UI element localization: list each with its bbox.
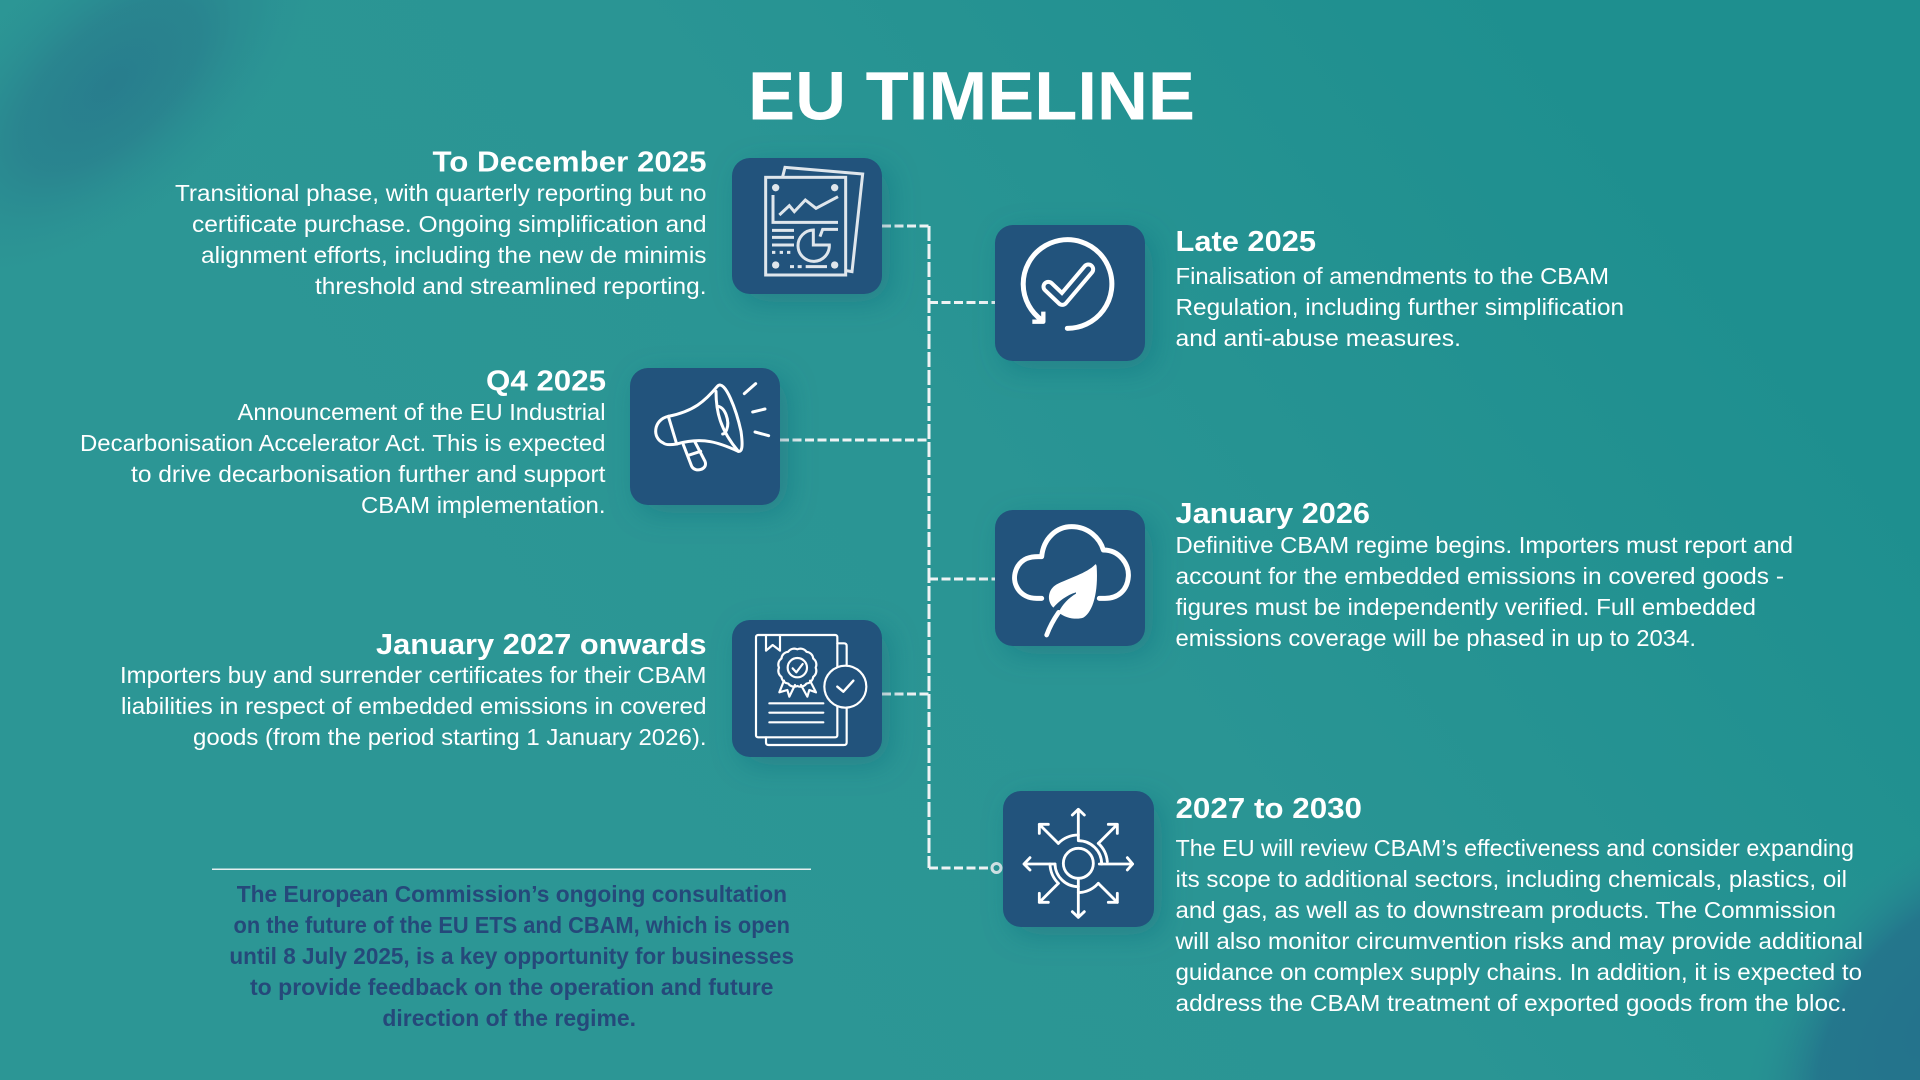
callout: consultation note: to provide feedback on the operation and future — [250, 974, 774, 1000]
heading: 2027 to 2030: 2027 to 2030 — [1176, 793, 1362, 825]
body: To December 2025: threshold and streamlined reporting. — [315, 273, 706, 299]
callout: consultation note — [212, 868, 811, 1031]
body: January 2027 onwards: Importers buy and surrender certificates for their CBAM — [120, 662, 706, 688]
heading: Q4 2025: Q4 2025 — [486, 366, 606, 398]
panel: Late 2025 text — [1176, 226, 1624, 351]
panel: Q4 2025 text — [80, 366, 606, 518]
body: Late 2025 — [1176, 263, 1624, 351]
body: Q4 2025: to drive decarbonisation further and support — [131, 461, 606, 487]
icon: report documents — [732, 158, 882, 294]
callout: consultation note: on the future of the EU ETS and CBAM, which is open — [234, 912, 790, 938]
body: 2027 to 2030: and gas, as well as to downstream products. The Commission — [1176, 897, 1836, 923]
panel: January 2026 text — [1176, 498, 1793, 651]
body: January 2026 — [1176, 532, 1793, 651]
body: To December 2025: certificate purchase. Ongoing simplification and — [192, 211, 706, 237]
callout: consultation note: direction of the regime. — [382, 1005, 636, 1031]
callout: consultation note: The European Commission’s ongoing consultation — [237, 881, 787, 907]
body: Q4 2025: CBAM implementation. — [361, 492, 606, 518]
panel: 2027 to 2030 text — [1174, 793, 1863, 1016]
body: Q4 2025: Decarbonisation Accelerator Act. This is expected — [80, 430, 606, 456]
body: 2027 to 2030: address the CBAM treatment of exported goods from the bloc. — [1176, 990, 1847, 1016]
body: Late 2025: and anti-abuse measures. — [1176, 325, 1461, 351]
body: 2027 to 2030 — [1174, 835, 1863, 1016]
body: January 2026: Definitive CBAM regime begins. Importers must report and — [1176, 532, 1793, 558]
body: January 2026: account for the embedded emissions in covered goods - — [1176, 563, 1784, 589]
panel: To December 2025 text — [175, 146, 706, 299]
icon: megaphone — [630, 368, 780, 505]
heading: January 2027 onwards: January 2027 onwards — [376, 629, 706, 661]
body: January 2027 onwards — [120, 662, 706, 750]
body: 2027 to 2030: The EU will review CBAM’s effectiveness and consider expanding — [1176, 835, 1854, 861]
body: January 2026: emissions coverage will be phased in up to 2034. — [1176, 625, 1696, 651]
heading: Late 2025: Late 2025 — [1176, 226, 1316, 258]
icon: expanding arrows hub — [1003, 791, 1154, 927]
body: To December 2025: Transitional phase, with quarterly reporting but no — [175, 180, 706, 206]
body: January 2027 onwards: liabilities in respect of embedded emissions in covered — [121, 693, 706, 719]
timeline connector lines — [780, 226, 1001, 872]
icon: cloud with leaf — [995, 510, 1145, 646]
body: Q4 2025 — [80, 399, 606, 518]
body: Late 2025: Finalisation of amendments to the CBAM — [1176, 263, 1609, 289]
icon: certificate with check — [732, 620, 882, 757]
body: 2027 to 2030: will also monitor circumvention risks and may provide additional — [1174, 928, 1863, 954]
icon: circular check — [995, 225, 1145, 361]
body: 2027 to 2030: guidance on complex supply chains. In addition, it is expected to — [1176, 959, 1862, 985]
callout: consultation note: until 8 July 2025, is a key opportunity for businesses — [229, 943, 794, 969]
body: Late 2025: Regulation, including further simplification — [1176, 294, 1624, 320]
panel: January 2027 onwards text — [120, 629, 706, 750]
body: Q4 2025: Announcement of the EU Industrial — [238, 399, 606, 425]
heading: To December 2025: To December 2025 — [432, 146, 706, 178]
body: January 2027 onwards: goods (from the period starting 1 January 2026). — [193, 724, 706, 750]
body: To December 2025 — [175, 180, 706, 299]
body: January 2026: figures must be independently verified. Full embedded — [1176, 594, 1756, 620]
body: To December 2025: alignment efforts, including the new de minimis — [201, 242, 706, 268]
title: EU TIMELINE — [748, 58, 1195, 134]
body: 2027 to 2030: its scope to additional sectors, including chemicals, plastics, oil — [1176, 866, 1847, 892]
heading: January 2026: January 2026 — [1176, 498, 1370, 530]
